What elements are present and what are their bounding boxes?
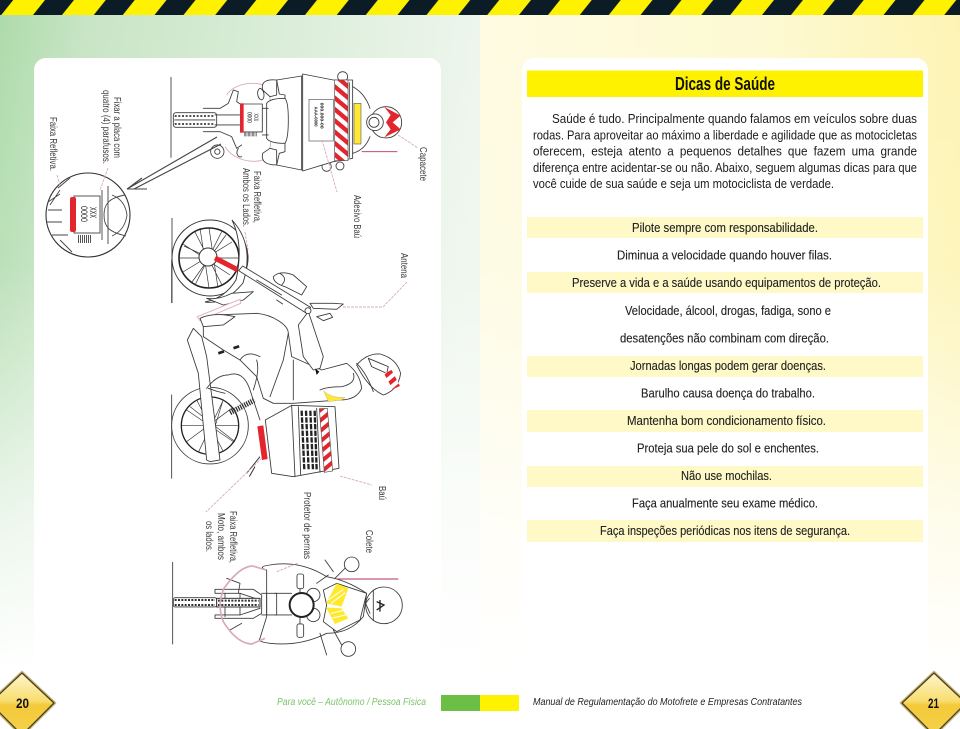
- page number badge 21: 21: [928, 695, 939, 711]
- panel: motorcycle diagrams: [34, 58, 441, 688]
- label: Antena: Antena: [398, 253, 409, 278]
- diagram: side view front wheel: [172, 218, 248, 303]
- leg protector: [220, 566, 266, 644]
- label: Fixar a placa: [100, 90, 122, 164]
- label: Faixa Refletiva, Moto: Faixa Refletiva,: [227, 511, 238, 563]
- wheel near the arrow: [211, 145, 224, 158]
- front helmet: [366, 587, 402, 624]
- mirrors: [317, 557, 359, 656]
- box label: 000.000-00: [319, 103, 325, 129]
- label: Faixa Refletiva, Moto: os lados.: [203, 521, 214, 552]
- rear tyre: [173, 113, 217, 127]
- label: Faixa Refletiva plate: Faixa Refletiva.: [47, 117, 58, 171]
- headlight and grips: [275, 574, 367, 637]
- tip 11: Faça inspeções periódicas nos itens de segurança.: [600, 524, 850, 538]
- tip 9: [527, 466, 923, 487]
- rear plate: [240, 103, 262, 134]
- footer right text: Manual de Regulamentação do Motofrete e Empresas Contratantes: [533, 696, 803, 708]
- label: Faixa Refletiva, Ambos os Lados: [240, 168, 262, 227]
- label: Faixa Refletiva, Ambos os Lados: Faixa Refletiva,: [251, 171, 262, 223]
- detail circle: licence plate: [46, 173, 130, 257]
- rear wheel: [172, 387, 248, 464]
- right page yellow background: [480, 15, 960, 729]
- label: Faixa Refletiva, Ambos os Lados: Ambos os Lados.: [240, 168, 251, 227]
- page number badge 20: 20: [16, 695, 29, 711]
- intro paragraph: diferença entre acidentar-se ou não. Abaixo, seguem algumas dicas para que: [533, 161, 917, 175]
- page number badge 21: [901, 672, 960, 729]
- diagram: rear view of motorcycle: [171, 72, 402, 171]
- label: Capacete: Capacete: [417, 147, 428, 181]
- delivery box: [303, 74, 353, 171]
- handlebar: [239, 266, 343, 321]
- label: Adesivo Baú: Adesivo Baú: [351, 195, 362, 238]
- yellow stripe: [354, 103, 361, 144]
- helmet: [367, 107, 402, 138]
- footer colour swatches: [441, 695, 519, 711]
- rear plate: XXX: [252, 113, 259, 122]
- heading: Dicas de Saúde: [527, 70, 923, 97]
- left page green background: [0, 15, 480, 729]
- tips list: [527, 217, 923, 542]
- front tyre and fork: [173, 578, 277, 630]
- side helmet: [357, 354, 401, 395]
- tip 5: [527, 356, 923, 377]
- tip 7: [527, 410, 923, 432]
- tip 1: [527, 217, 923, 238]
- tip 10: Faça anualmente seu exame médico.: [632, 496, 818, 510]
- label: Faixa Refletiva, Moto: [203, 511, 238, 563]
- rear carrier box: [265, 405, 339, 477]
- tip 3: [527, 272, 923, 293]
- tip 2: Diminua a velocidade quando houver filas.: [617, 248, 832, 262]
- rider body: [203, 313, 362, 403]
- tip 1: Pilote sempre com responsabilidade.: [632, 221, 818, 235]
- tip 4: [620, 304, 831, 346]
- box label: AAA-0000: [313, 107, 319, 127]
- hazard stripe top band: [0, 0, 960, 15]
- panel: health tips: [522, 58, 928, 688]
- leader lines: [57, 135, 418, 572]
- label: Fixar a placa: Fixar a placa com: [111, 97, 122, 158]
- tip 4: desatenções não combinam com direção.: [620, 332, 829, 346]
- label: Fixar a placa: quatro (4) parafusos.: [100, 90, 111, 164]
- rear plate: 0000: [245, 112, 252, 123]
- heading: Dicas de Saúde: Dicas de Saúde: [675, 74, 775, 94]
- intro paragraph: [533, 112, 917, 191]
- tip 7: Mantenha bom condicionamento físico.: [627, 414, 826, 428]
- tip 5: Jornadas longas podem gerar doenças.: [630, 359, 826, 373]
- tip 4: Velocidade, álcool, drogas, fadiga, sono e: [625, 304, 831, 318]
- detail circle: licence plate: 0000: [79, 206, 89, 222]
- detail circle: licence plate: XXX: [88, 207, 98, 218]
- tip 8: Proteja sua pele do sol e enchentes.: [637, 442, 819, 456]
- arrow to plate detail: [127, 137, 221, 189]
- diagram: front view motorcycle and rider: [173, 557, 402, 656]
- label: Baú: Baú: [376, 486, 387, 500]
- label: Protetor de pernas: Protetor de pernas: [301, 492, 312, 559]
- tip 11: [527, 520, 923, 542]
- tip 6: Barulho causa doença do trabalho.: [641, 386, 815, 400]
- page number badge 20: [0, 672, 55, 729]
- intro paragraph: oferecem, esteja atento a pequenos detalhes que fazem uma grande: [533, 145, 917, 159]
- footer left text: Para você – Autônomo / Pessoa Física: [277, 696, 426, 708]
- intro paragraph: rodas. Para aproveitar ao máximo a liberdade e agilidade que as motocicletas: [533, 128, 917, 142]
- label: Colete: Colete: [363, 530, 374, 553]
- intro paragraph: Saúde é tudo. Principalmente quando falamos em veículos sobre duas: [552, 112, 917, 126]
- reflective vest chevrons: [326, 583, 348, 624]
- label: Faixa Refletiva, Moto: Moto, ambos: [215, 513, 226, 560]
- tip 3: Preserve a vida e a saúde usando equipamentos de proteção.: [572, 276, 881, 290]
- diagram: side view motorcycle and rider: [172, 260, 401, 478]
- vest: [323, 391, 345, 402]
- box label: [309, 99, 333, 141]
- tip 9: Não use mochilas.: [681, 469, 772, 483]
- intro paragraph: você cuide de sua saúde e seja um motociclista de verdade.: [533, 177, 834, 191]
